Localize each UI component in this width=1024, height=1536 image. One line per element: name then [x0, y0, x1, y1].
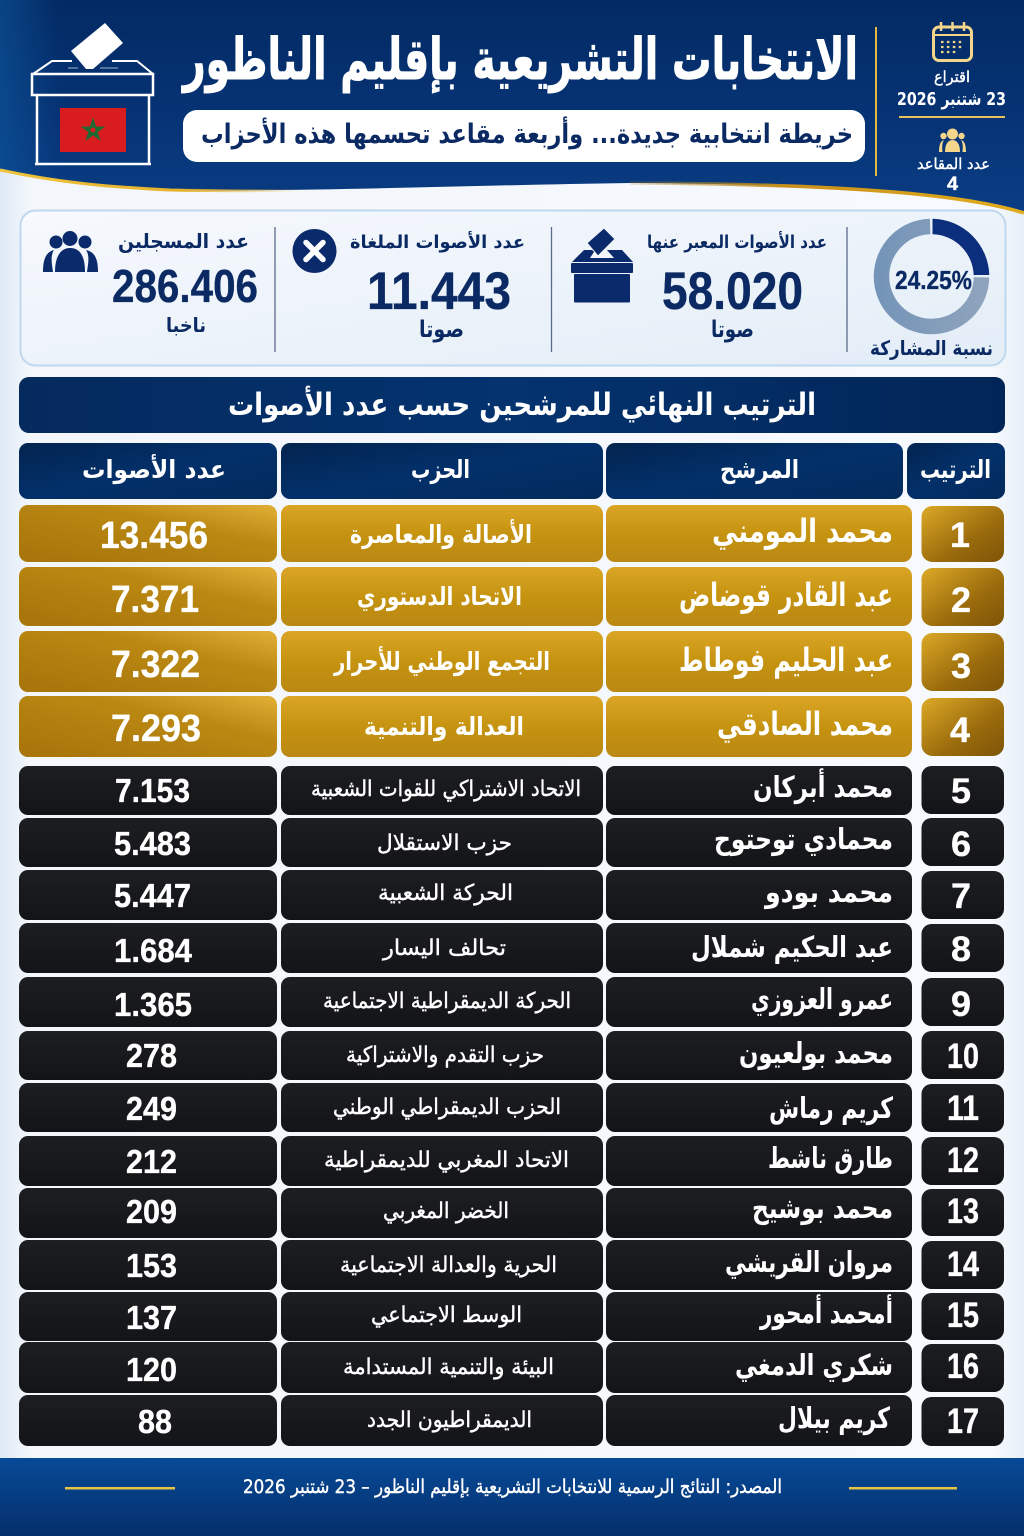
stat: invalid votes: صوتا [419, 317, 464, 343]
icon: voters group [43, 231, 98, 272]
candidate: كريم بيلال [778, 1401, 890, 1435]
party [281, 1188, 603, 1238]
rank: 16 [947, 1347, 979, 1386]
row 7 [19, 870, 1004, 920]
rank [922, 978, 1004, 1026]
votes: 88 [138, 1403, 172, 1440]
row 2 [19, 567, 1004, 626]
votes [19, 1292, 277, 1341]
column header: party [281, 443, 603, 499]
row 13 [19, 1188, 1004, 1238]
candidate: محمد المومني [712, 512, 893, 550]
candidate [606, 1083, 912, 1132]
votes: 7.293 [111, 708, 201, 750]
row 17 [19, 1395, 1004, 1446]
rank: 6 [951, 825, 971, 864]
rank: 12 [947, 1141, 979, 1180]
icon: cancel circle [292, 229, 336, 273]
chart: participation donut: 24.25% [895, 265, 972, 295]
party: التجمع الوطني للأحرار [332, 646, 550, 677]
votes: 7.371 [111, 579, 199, 621]
stat: votes cast: عدد الأصوات المعبر عنها [647, 231, 827, 253]
party: العدالة والتنمية [364, 712, 524, 742]
votes: 5.447 [114, 877, 191, 914]
party [281, 1395, 603, 1446]
party [281, 696, 603, 757]
party: البيئة والتنمية المستدامة [343, 1355, 554, 1380]
votes: 7.322 [111, 644, 200, 686]
candidate [606, 766, 912, 815]
votes [19, 1136, 277, 1186]
rank [922, 1293, 1004, 1340]
votes: 249 [126, 1090, 177, 1127]
rank [922, 506, 1004, 562]
stat: invalid votes: عدد الأصوات الملغاة [350, 231, 525, 253]
party: الديمقراطيون الجدد [367, 1408, 532, 1433]
candidate [606, 870, 912, 920]
candidate: طارق ناشط [768, 1141, 893, 1175]
candidate [606, 696, 912, 757]
votes [19, 696, 277, 757]
candidate: محمد الصادقي [717, 705, 893, 743]
votes [19, 766, 277, 815]
votes: 278 [126, 1037, 177, 1074]
column header: votes [19, 443, 277, 499]
party: الاتحاد الاشتراكي للقوات الشعبية [311, 777, 581, 802]
seats value: 4 [947, 174, 958, 195]
votes [19, 1342, 277, 1393]
candidate: عبد القادر قوضاض [679, 576, 893, 614]
candidate [606, 1240, 912, 1290]
candidate: عبد الحكيم شملال [691, 930, 893, 964]
party: الأصالة والمعاصرة [350, 519, 532, 550]
column header: votes: عدد الأصوات [82, 454, 226, 485]
party: حزب التقدم والاشتراكية [346, 1043, 544, 1068]
subtitle pill: خريطة انتخابية جديدة... وأربعة مقاعد تحسمها هذه الأحزاب [201, 116, 853, 150]
party [281, 766, 603, 815]
row 3 [19, 631, 1004, 692]
party: الحزب الديمقراطي الوطني [333, 1095, 561, 1120]
party: الحرية والعدالة الاجتماعية [340, 1253, 557, 1278]
stat: registered voters: ناخبا [166, 313, 206, 337]
rank: 2 [951, 581, 971, 620]
party: تحالف اليسار [382, 936, 506, 961]
divider: date rule [899, 116, 1005, 118]
candidate [606, 1188, 912, 1238]
row 6 [19, 818, 1004, 867]
rank: 3 [951, 647, 971, 686]
rank: 5 [951, 772, 971, 811]
rank: 4 [950, 711, 971, 750]
party [281, 1083, 603, 1132]
party [281, 1136, 603, 1186]
rank [922, 1189, 1004, 1236]
row 12 [19, 1136, 1004, 1186]
rank [922, 1084, 1004, 1132]
rank [922, 1137, 1004, 1185]
rank [922, 766, 1004, 814]
source text: المصدر: النتائج الرسمية للانتخابات التشريعية بإقليم الناظور – 23 شتنبر 2026 [243, 1476, 782, 1499]
candidate [606, 1292, 912, 1341]
votes [19, 923, 277, 973]
chart: participation donut [881, 219, 989, 327]
rank: 14 [947, 1245, 979, 1284]
candidate: محمد بولعيون [739, 1036, 893, 1070]
votes [19, 1395, 277, 1446]
rank [922, 633, 1004, 691]
votes [19, 1240, 277, 1290]
candidate [606, 1136, 912, 1186]
candidate: كريم رماش [769, 1091, 893, 1125]
row 1 [19, 505, 1004, 562]
divider: header vertical rule [875, 27, 877, 176]
rank [922, 1397, 1004, 1446]
stat: votes cast: 58.020 [662, 262, 803, 321]
rank: 15 [947, 1296, 979, 1335]
votes [19, 567, 277, 626]
candidate [606, 505, 912, 562]
stat: invalid votes [350, 231, 525, 343]
candidate: عمرو العزوزي [751, 982, 893, 1016]
votes: 5.483 [114, 825, 191, 862]
row 10 [19, 1031, 1004, 1080]
votes: 212 [126, 1143, 177, 1180]
panel: key stats [20, 210, 1006, 366]
row 14 [19, 1240, 1004, 1290]
votes [19, 1083, 277, 1132]
party [281, 870, 603, 920]
candidate: أمحمد أمحور [759, 1294, 893, 1330]
votes [19, 631, 277, 692]
row 15 [19, 1292, 1004, 1341]
party: الاتحاد الدستوري [357, 582, 522, 612]
candidate: مروان القريشي [725, 1245, 893, 1279]
votes: 137 [126, 1299, 177, 1336]
party [281, 923, 603, 973]
participation label: نسبة المشاركة [870, 336, 993, 360]
seats label: عدد المقاعد [917, 155, 990, 173]
votes: 209 [126, 1193, 177, 1230]
column header: candidate: المرشح [720, 455, 799, 485]
rank [922, 818, 1004, 866]
rank: 13 [947, 1192, 979, 1231]
banner: ranking heading [19, 377, 1005, 433]
candidate [606, 631, 912, 692]
party [281, 977, 603, 1027]
rank: 10 [947, 1037, 979, 1076]
party [281, 1342, 603, 1393]
row 16 [19, 1342, 1004, 1393]
column header: party: الحزب [411, 455, 470, 485]
candidate [606, 818, 912, 867]
votes: 7.153 [115, 772, 190, 809]
stat: registered voters: عدد المسجلين [118, 229, 249, 253]
candidate: شكري الدمغي [735, 1348, 893, 1382]
candidate [606, 1395, 912, 1446]
party [281, 631, 603, 692]
icon: seats people [939, 128, 966, 152]
row 5 [19, 766, 1004, 815]
candidate [606, 1342, 912, 1393]
row 9 [19, 977, 1004, 1027]
row 8 [19, 923, 1004, 973]
rank [922, 1241, 1004, 1289]
header band [0, 0, 1024, 213]
party: الاتحاد المغربي للديمقراطية [324, 1148, 569, 1173]
rank: 8 [951, 930, 971, 969]
candidate [606, 923, 912, 973]
votes: 153 [126, 1247, 177, 1284]
candidate: محمد أبركان [753, 768, 893, 804]
candidate: محمادي توحتوح [714, 822, 893, 856]
votes [19, 1188, 277, 1238]
party: حزب الاستقلال [377, 831, 512, 856]
row 4 [19, 696, 1004, 757]
candidate [606, 1031, 912, 1080]
icon: ballot box navy [571, 228, 633, 302]
table header row [19, 443, 1005, 499]
rank: 9 [951, 985, 971, 1024]
rank [922, 1344, 1004, 1392]
footer band [0, 1458, 1024, 1536]
party [281, 505, 603, 562]
party: الحركة الديمقراطية الاجتماعية [323, 989, 571, 1014]
party [281, 818, 603, 867]
icon: ballot box with Moroccan flag [32, 23, 153, 164]
icon: calendar [934, 22, 972, 60]
rank [922, 1031, 1004, 1079]
party [281, 1292, 603, 1341]
stat: registered voters: 286.406 [112, 260, 258, 312]
rank: 1 [950, 516, 970, 555]
rank [922, 924, 1004, 972]
party [281, 1240, 603, 1290]
party: الخضر المغربي [383, 1199, 509, 1224]
votes [19, 505, 277, 562]
rank: 7 [951, 877, 971, 916]
stat: votes cast [647, 231, 827, 343]
candidate [606, 977, 912, 1027]
votes: 1.365 [114, 986, 192, 1023]
column header: rank [907, 443, 1005, 499]
party: الحركة الشعبية [378, 881, 513, 906]
rank [922, 568, 1004, 626]
candidate [606, 567, 912, 626]
candidate: محمد بودو [763, 875, 893, 909]
votes: 1.684 [114, 932, 193, 969]
stat: registered voters [112, 229, 258, 337]
row 11 [19, 1083, 1004, 1132]
stat: invalid votes: 11.443 [367, 262, 511, 321]
banner: ranking heading: الترتيب النهائي للمرشحين حسب عدد الأصوات [228, 385, 816, 423]
rank [922, 698, 1004, 756]
rank [922, 871, 1004, 919]
party: الوسط الاجتماعي [371, 1303, 522, 1328]
votes: 13.456 [100, 515, 208, 557]
votes [19, 870, 277, 920]
subtitle pill [183, 110, 865, 162]
candidate: محمد بوشيح [752, 1191, 893, 1225]
rank: 17 [947, 1402, 979, 1441]
party [281, 1031, 603, 1080]
date value: 23 شتنبر 2026 [897, 89, 1006, 110]
rank: 11 [947, 1089, 979, 1128]
date label: اقتراع [934, 68, 970, 86]
column header: candidate [606, 443, 903, 499]
votes: 120 [126, 1351, 177, 1388]
votes [19, 977, 277, 1027]
votes [19, 1031, 277, 1080]
votes [19, 818, 277, 867]
candidate: عبد الحليم فوطاط [679, 641, 893, 679]
stat: votes cast: صوتا [711, 317, 754, 343]
column header: rank: الترتيب [920, 455, 991, 485]
party [281, 567, 603, 626]
